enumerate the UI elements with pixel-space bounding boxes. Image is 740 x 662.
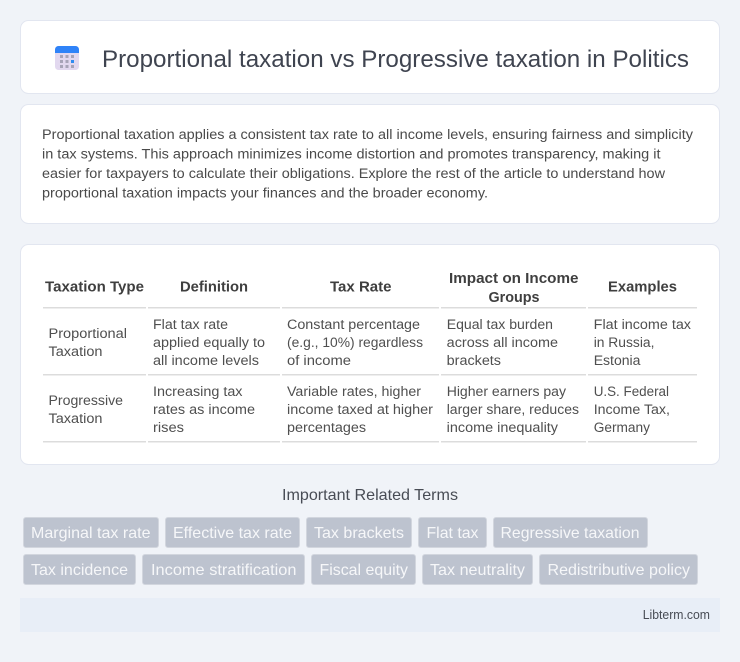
table row: proportional taxation: Flat income tax — [594, 317, 691, 333]
table header row — [45, 271, 677, 306]
tag: income stratification: Income stratification — [151, 562, 296, 579]
table header row: Tax Rate — [330, 280, 392, 296]
table row: proportional taxation: Constant percentage — [287, 317, 420, 333]
table row: progressive taxation: income taxed at higher — [287, 402, 433, 418]
tag: marginal tax rate — [24, 518, 158, 548]
tag: redistributive policy: Redistributive policy — [548, 562, 690, 579]
table row: progressive taxation: Variable rates, higher — [287, 384, 421, 400]
table header row: Examples — [608, 280, 677, 296]
tag: redistributive policy — [540, 554, 698, 584]
table header row: Taxation Type — [45, 280, 144, 296]
table row: proportional taxation: of income — [287, 353, 351, 369]
table row: proportional taxation: Proportional — [48, 326, 127, 342]
table row: progressive taxation: Progressive — [48, 393, 123, 409]
table row: proportional taxation: in Russia, — [594, 335, 654, 351]
table row: proportional taxation: Taxation — [48, 344, 102, 360]
tag: tax neutrality: Tax neutrality — [430, 562, 525, 579]
tag: regressive taxation: Regressive taxation — [500, 525, 640, 542]
icon: calendar — [55, 46, 79, 70]
tag: tax neutrality — [422, 554, 532, 584]
table row: progressive taxation: U.S. Federal — [594, 384, 669, 400]
tag: flat tax: Flat tax — [426, 525, 479, 542]
intro text: Proportional taxation applies a consistent tax rate to all income levels, ensuring fairness and simplicity — [42, 127, 694, 143]
tag: tax brackets — [306, 518, 412, 548]
tag: fiscal equity: Fiscal equity — [320, 562, 408, 579]
tag: fiscal equity — [312, 554, 416, 584]
table row: progressive taxation: larger share, reduces — [447, 402, 579, 418]
table row: proportional taxation: Equal tax burden — [447, 317, 553, 333]
table row: progressive taxation: rates as income — [153, 402, 255, 418]
table row: progressive taxation: Increasing tax — [153, 384, 242, 400]
intro text: easier for taxpayers to calculate their obligations. Explore the rest of the article to understand how — [42, 166, 666, 182]
title: Proportional taxation vs Progressive taxation in Politics — [102, 46, 689, 73]
table row: proportional taxation: across all income — [447, 335, 558, 351]
table row: progressive taxation: income inequality — [447, 420, 559, 436]
table header row: Groups — [488, 290, 540, 306]
table row: proportional taxation: Flat tax rate — [153, 317, 228, 333]
footer attribution: Libterm.com — [643, 608, 710, 622]
heading: important related terms: Important Related Terms — [282, 487, 458, 504]
table row: proportional taxation: (e.g., 10%) regardless — [287, 335, 423, 351]
tag: tax incidence: Tax incidence — [31, 562, 128, 579]
tag: flat tax — [418, 518, 486, 548]
panel: comparison table — [20, 244, 720, 464]
intro text: proportional taxation impacts your finances and the broader economy. — [42, 186, 488, 202]
intro text — [42, 127, 694, 202]
footer — [20, 598, 720, 632]
table row: progressive taxation — [48, 384, 670, 436]
table row: progressive taxation: rises — [153, 420, 184, 436]
tag: effective tax rate — [166, 518, 300, 548]
table row: progressive taxation: Income Tax, — [594, 402, 670, 418]
table header row: Definition — [180, 280, 248, 296]
tag: regressive taxation — [494, 518, 648, 548]
panel: introduction — [20, 104, 720, 224]
table row: progressive taxation: Taxation — [48, 411, 102, 427]
tag: tax incidence — [24, 554, 136, 584]
tag: income stratification — [142, 554, 304, 584]
table header row: Impact on Income — [449, 271, 578, 287]
table row: progressive taxation: Germany — [594, 420, 651, 436]
panel: header — [20, 20, 720, 94]
table row: proportional taxation: Estonia — [594, 353, 641, 369]
table row: proportional taxation: applied equally to — [153, 335, 265, 351]
table row: progressive taxation: Higher earners pay — [447, 384, 567, 400]
table row: proportional taxation: all income levels — [153, 353, 259, 369]
tag: effective tax rate: Effective tax rate — [173, 525, 292, 542]
table row: progressive taxation: percentages — [287, 420, 366, 436]
table row: proportional taxation — [48, 317, 691, 369]
intro text: in tax systems. This approach minimizes income distortion and promotes transparency, making it — [42, 146, 661, 162]
related terms tags — [24, 518, 698, 584]
tag: marginal tax rate: Marginal tax rate — [31, 525, 150, 542]
tag: tax brackets: Tax brackets — [314, 525, 404, 542]
table row: proportional taxation: brackets — [447, 353, 501, 369]
